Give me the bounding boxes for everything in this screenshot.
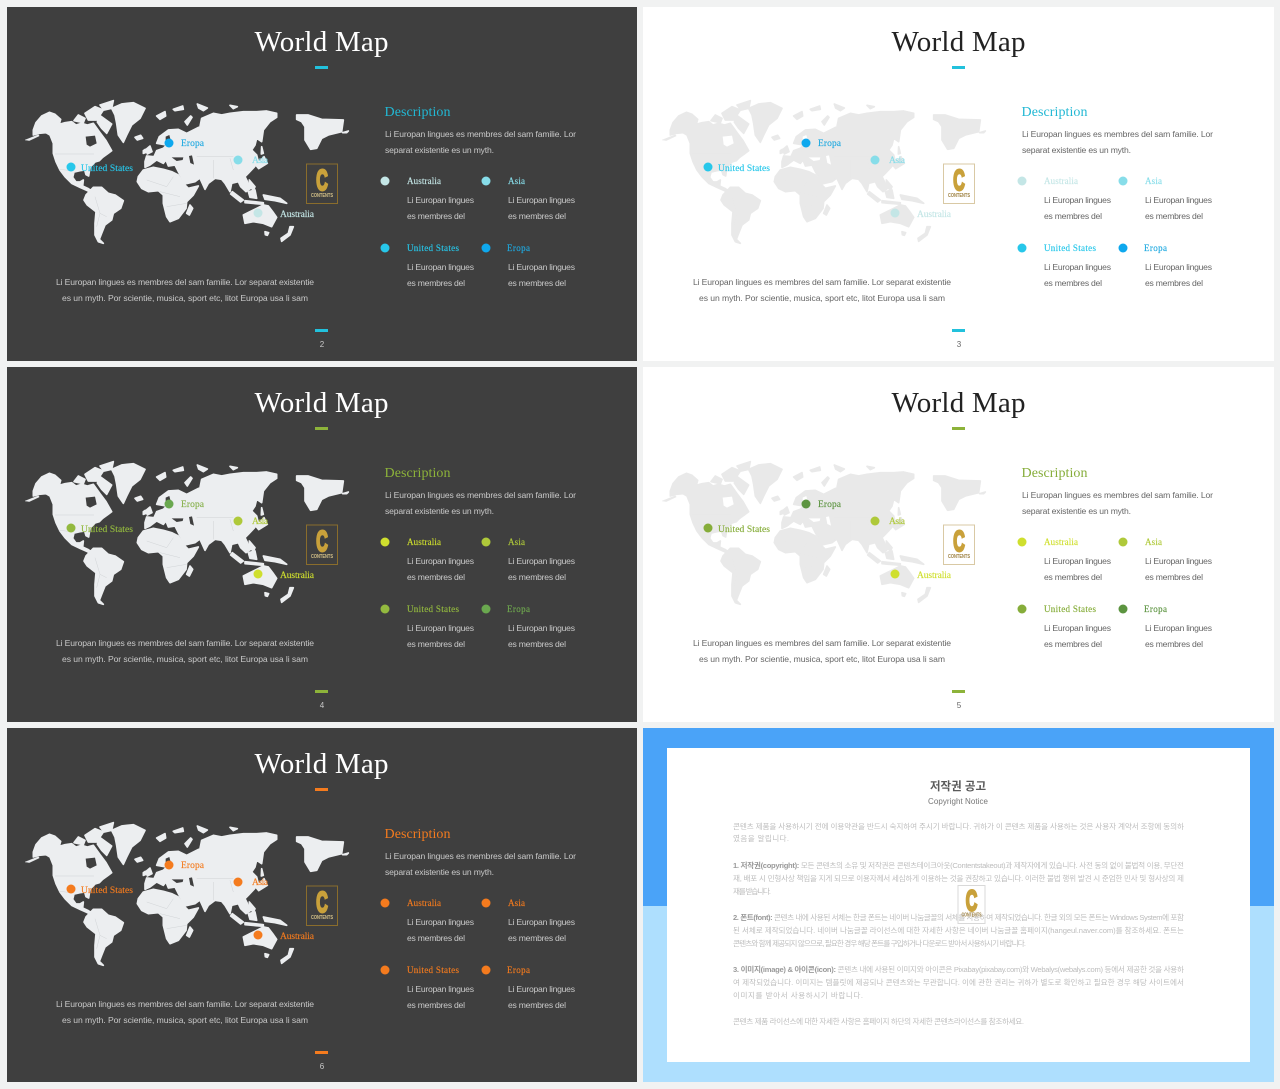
caption: es un myth. Por scientie, musica, sport etc, litot Europa usa li sam [62,293,308,303]
world map [25,823,348,965]
legend: United States [1044,604,1096,614]
caption [56,638,314,664]
legend: Li Europan lingues [407,623,474,633]
page number [315,1051,328,1071]
title: World Map [892,387,1026,419]
legend: Asia [508,898,525,908]
description: separat existentie es un myth. [385,506,494,516]
description: Li Europan lingues es membres del sam familie. Lor [385,851,576,861]
logo: C [316,886,328,918]
legend: es membres del [1044,639,1102,649]
map markers: Australia [917,571,952,581]
map markers: United States [718,525,770,535]
legend: Eropa [1144,243,1167,253]
notice text: 된 서체로 제작되었습니다. 네이버 나눔글꼴 라이선스에 대한 자세한 사항은 네이버 나눔글꼴 홈페이지(hangeul.naver.com)를 참조하세요. 폰트는 [733,925,1184,935]
panel: dark orange world map slide [7,728,637,1082]
logo [306,164,338,204]
page number: 2 [320,340,325,349]
panel: dark green world map slide [7,367,637,722]
notice text: 콘텐츠 제품을 사용하시기 전에 이용약관을 반드시 숙지하여 주시기 바랍니다. 귀하가 이 콘텐츠 제품을 사용하는 것은 사용자 계약서 조항에 동의하 [733,821,1184,831]
legend: Eropa [507,243,530,253]
notice heading [928,779,989,806]
map markers: Eropa [818,139,842,149]
page number: 6 [320,1062,325,1071]
legend: es membres del [407,572,465,582]
legend: es membres del [508,1000,566,1010]
legend: Australia [1044,176,1078,186]
logo [306,886,338,926]
legend: es membres del [407,211,465,221]
notice text: 재, 배포 시 민형사상 책임을 지게 되므로 이용자께서 세심하게 이용하는 것을 권장하고 있습니다. 이러한 불법 행위 발견 시 준엄한 민사 및 형사상의 제 [733,873,1184,883]
legend: Li Europan lingues [1044,195,1111,205]
legend: Li Europan lingues [407,195,474,205]
legend: Li Europan lingues [508,195,575,205]
legend: Australia [407,537,441,547]
legend [1018,537,1212,649]
page number: 3 [957,340,962,349]
panel: light blue world map slide [643,7,1274,361]
logo [306,525,338,564]
map markers: Australia [280,932,315,942]
caption: Li Europan lingues es membres del sam familie. Lor separat existentie [693,638,951,648]
map markers: Eropa [181,500,205,510]
description: Description [384,466,450,481]
legend: Asia [508,176,525,186]
panel: light green world map slide [643,367,1274,722]
notice text: 2. 폰트(font): 콘텐츠 내에 사용된 서체는 한글 폰트는 네이버 나눔글꼴의 서체를 사용하여 제작되었습니다. 한글 외의 모든 폰트는 Windows System에 포함 [733,912,1184,922]
map markers [66,860,315,942]
legend: es membres del [508,933,566,943]
description [384,466,576,516]
legend: Li Europan lingues [508,262,575,272]
legend: Li Europan lingues [1145,623,1212,633]
map markers [704,500,952,581]
title: World Map [892,26,1026,58]
caption: Li Europan lingues es membres del sam familie. Lor separat existentie [56,638,314,648]
description: separat existentie es un myth. [385,145,494,155]
notice text [733,821,1184,1026]
logo: C [316,164,328,196]
map markers: Australia [280,571,315,581]
title: World Map [254,26,388,58]
map markers [704,138,952,220]
legend: Li Europan lingues [407,556,474,566]
notice text: 3. 이미지(image) & 아이콘(icon): 콘텐츠 내에 사용된 이미지와 아이콘은 Pixabay(pixabay.com)와 Webalys(webalys.com) 등에서 제공한 것을 사용하 [733,964,1184,974]
page number [952,329,965,349]
notice heading: 저작권 공고 [930,779,986,793]
legend: Eropa [507,965,530,975]
caption [56,999,314,1025]
map markers: Asia [252,517,269,527]
legend: United States [1044,243,1096,253]
description [384,105,576,155]
map markers: Asia [889,517,906,527]
legend: Asia [508,537,525,547]
legend: Asia [1145,537,1162,547]
legend [1018,176,1212,288]
legend: Li Europan lingues [508,917,575,927]
notice text: 재를 받습니다. [733,886,771,896]
panel: dark blue world map slide [7,7,637,361]
description: Description [384,105,450,120]
map markers: Eropa [818,500,842,510]
legend: Li Europan lingues [508,984,575,994]
legend: Li Europan lingues [1145,195,1212,205]
legend: United States [407,243,459,253]
notice text: 1. 저작권(copyright): 모든 콘텐츠의 소유 및 저작권은 콘텐츠테이크아웃(Contentstakeout)과 제작자에게 있습니다. 사전 동의 없이 불법적 이용, 무단전 [733,860,1184,870]
caption: Li Europan lingues es membres del sam familie. Lor separat existentie [693,277,951,287]
legend: es membres del [1145,278,1203,288]
page number [952,690,965,710]
world map [25,462,348,604]
page number [315,329,328,349]
description [384,827,576,877]
logo: C [953,164,965,196]
legend: Li Europan lingues [1145,262,1212,272]
world map [662,101,985,243]
logo watermark [958,884,985,924]
map markers [66,138,315,220]
logo: CONTENTS [948,193,971,199]
legend: es membres del [508,278,566,288]
description: Li Europan lingues es membres del sam familie. Lor [385,129,576,139]
legend: United States [407,965,459,975]
legend: es membres del [508,639,566,649]
legend [380,176,575,288]
caption: es un myth. Por scientie, musica, sport etc, litot Europa usa li sam [62,654,308,664]
page number: 4 [320,701,325,710]
legend: es membres del [1044,211,1102,221]
map markers: Asia [252,156,269,166]
logo: C [316,525,328,557]
caption: es un myth. Por scientie, musica, sport etc, litot Europa usa li sam [699,654,945,664]
legend: Australia [407,176,441,186]
map markers: Asia [889,156,906,166]
legend: United States [407,604,459,614]
notice text: 콘텐츠 제품 라이선스에 대한 자세한 사항은 홈페이지 하단의 자세한 콘텐츠라이선스를 참조하세요. [733,1016,1024,1026]
legend: es membres del [508,211,566,221]
map markers: Eropa [181,139,205,149]
legend: es membres del [1044,278,1102,288]
description [1022,105,1213,155]
logo watermark: C [966,884,977,917]
description [1022,466,1213,516]
panel: copyright notice [643,728,1274,1082]
caption: es un myth. Por scientie, musica, sport etc, litot Europa usa li sam [699,293,945,303]
map markers: United States [81,525,133,535]
description: Li Europan lingues es membres del sam familie. Lor [385,490,576,500]
title: World Map [254,748,388,780]
legend: Australia [1044,537,1078,547]
legend: es membres del [407,933,465,943]
legend: es membres del [508,572,566,582]
logo [944,525,974,564]
logo: CONTENTS [311,193,334,199]
notice text: 여 제작되었습니다. 이미지는 템플릿에 제공되나 콘텐츠와는 무관합니다. 이에 관한 권리는 귀하가 별도로 확인하고 필요한 경우 해당 사이트에서 [733,977,1184,987]
caption [693,638,951,664]
description: Li Europan lingues es membres del sam familie. Lor [1022,490,1213,500]
logo: CONTENTS [948,554,971,560]
legend: Li Europan lingues [1044,623,1111,633]
legend: es membres del [1145,639,1203,649]
description: Description [1022,466,1088,481]
legend: es membres del [407,639,465,649]
legend: es membres del [407,278,465,288]
description: separat existentie es un myth. [1022,506,1131,516]
legend: Eropa [507,604,530,614]
caption: Li Europan lingues es membres del sam familie. Lor separat existentie [56,277,314,287]
legend: Asia [1145,176,1162,186]
legend [380,537,575,649]
page number: 5 [957,701,962,710]
legend: Li Europan lingues [407,984,474,994]
legend: Li Europan lingues [407,262,474,272]
title: World Map [254,387,388,419]
map markers: United States [81,886,133,896]
logo: C [953,525,965,557]
map markers: United States [81,164,133,174]
legend [380,898,575,1010]
description: Description [384,827,450,842]
map markers: Asia [252,878,269,888]
description: separat existentie es un myth. [385,867,494,877]
legend: es membres del [1145,572,1203,582]
description: separat existentie es un myth. [1022,145,1131,155]
caption [693,277,951,303]
notice text: 였음을 알립니다. [733,833,789,843]
legend: es membres del [407,1000,465,1010]
description: Description [1022,105,1088,120]
map markers: Australia [917,210,952,220]
legend: es membres del [1044,572,1102,582]
legend: Eropa [1144,604,1167,614]
notice text: 콘텐츠와 함께 제공되지 않으므로, 필요한 경우 해당 폰트를 구입하거나 다운로드 받아서 사용하시기 바랍니다. [733,938,1026,948]
world map [25,101,348,243]
legend: Li Europan lingues [508,623,575,633]
legend: Li Europan lingues [1044,262,1111,272]
logo: CONTENTS [311,915,334,921]
logo: CONTENTS [311,554,334,560]
legend: Australia [407,898,441,908]
caption: Li Europan lingues es membres del sam familie. Lor separat existentie [56,999,314,1009]
notice heading: Copyright Notice [928,797,989,806]
world map [662,462,985,604]
description: Li Europan lingues es membres del sam familie. Lor [1022,129,1213,139]
legend: Li Europan lingues [407,917,474,927]
map markers [66,500,315,581]
notice text: 이미지를 받아서 사용하시기 바랍니다. [733,990,863,1000]
legend: Li Europan lingues [1044,556,1111,566]
legend: es membres del [1145,211,1203,221]
map markers: Eropa [181,861,205,871]
caption: es un myth. Por scientie, musica, sport etc, litot Europa usa li sam [62,1015,308,1025]
map markers: Australia [280,210,315,220]
page number [315,690,328,710]
legend: Li Europan lingues [1145,556,1212,566]
logo watermark: CONTENTS [962,912,982,918]
map markers: United States [718,164,770,174]
legend: Li Europan lingues [508,556,575,566]
caption [56,277,314,303]
logo [944,164,974,204]
